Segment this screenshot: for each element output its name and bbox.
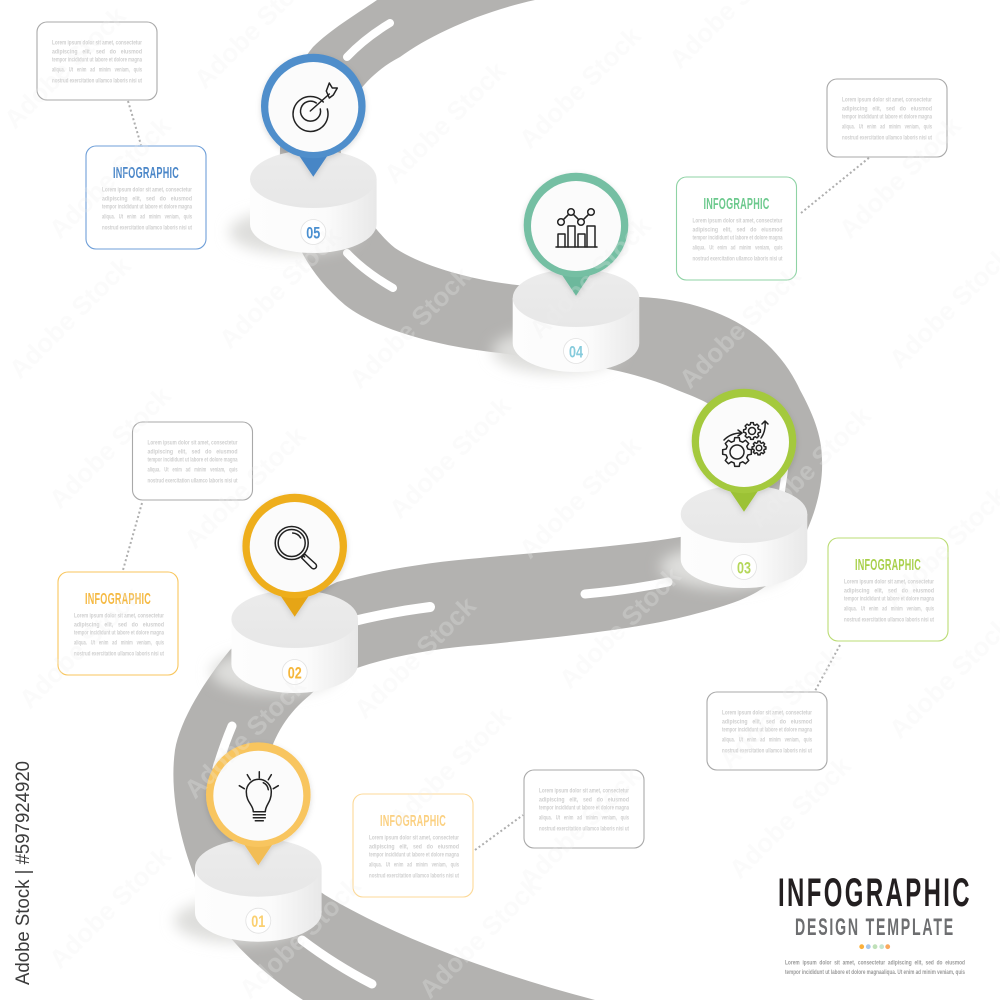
pin xyxy=(261,54,366,177)
number 03: 03 xyxy=(737,558,751,578)
panel: step 3 title card: aliqua. Ut enim ad minim veniam, quis xyxy=(844,605,934,612)
panel: step 3 description: nostrud exercitation ullamco laboris nisi ut xyxy=(722,747,812,754)
panel: step 1 description: nostrud exercitation ullamco laboris nisi ut xyxy=(539,825,629,832)
panel: step 2 title card: nostrud exercitation ullamco laboris nisi ut xyxy=(74,650,164,657)
panel: step 4 description: Lorem ipsum dolor sit amet, consectetur xyxy=(842,96,932,103)
dotted connectors xyxy=(123,101,870,850)
panel: step 1 description xyxy=(524,770,644,848)
watermarks: Adobe Stock xyxy=(713,640,847,774)
panel: step 4 title card: aliqua. Ut enim ad minim veniam, quis xyxy=(692,244,783,251)
number 02: 02 xyxy=(288,664,302,682)
panel: step 1 title card: tempor incididunt ut labore et dolore magna xyxy=(369,851,459,858)
road centre dashes xyxy=(217,23,785,984)
panel: step 4 description xyxy=(827,79,947,157)
footer paragraph xyxy=(785,960,965,976)
panel: step 2 description: tempor incididunt ut labore et dolore magna xyxy=(148,456,238,463)
panel: step 2 description xyxy=(132,422,252,500)
watermarks: Adobe Stock xyxy=(43,110,177,244)
panel: step 5 description: Lorem ipsum dolor sit amet, consectetur xyxy=(52,39,142,46)
panel: step 1 title card: aliqua. Ut enim ad minim veniam, quis xyxy=(369,861,459,868)
icon: magnifying glass xyxy=(275,526,317,569)
panel: step 5 title card: adipiscing elit, sed do eiusmod xyxy=(102,195,192,202)
icon: gears with arrows xyxy=(723,421,768,466)
watermarks: Adobe Stock xyxy=(43,380,177,514)
colour dots xyxy=(859,944,890,949)
watermarks: Adobe Stock xyxy=(513,430,647,564)
panel: step 5 title card: aliqua. Ut enim ad minim veniam, quis xyxy=(102,213,192,220)
panel: step 2 title card: adipiscing elit, sed do eiusmod xyxy=(74,621,164,628)
panel: step 2 description: aliqua. Ut enim ad minim veniam, quis xyxy=(148,466,238,473)
panel: step 5 title card: tempor incididunt ut labore et dolore magna xyxy=(102,203,192,210)
watermarks: Adobe Stock xyxy=(383,390,517,524)
panel: step 3 title card xyxy=(828,538,948,641)
watermarks: Adobe Stock xyxy=(13,580,147,714)
panel: step 4 description: aliqua. Ut enim ad minim veniam, quis xyxy=(842,123,932,130)
panel: step 3 description xyxy=(707,692,827,770)
panel: step 5 title card xyxy=(86,146,206,249)
watermarks: Adobe Stock xyxy=(213,220,347,354)
panel: step 2 title card: aliqua. Ut enim ad minim veniam, quis xyxy=(74,639,164,646)
pin xyxy=(206,742,311,865)
panel: step 4 description: nostrud exercitation ullamco laboris nisi ut xyxy=(842,134,932,141)
panel: step 1 description: aliqua. Ut enim ad minim veniam, quis xyxy=(539,814,629,821)
watermarks: Adobe Stock xyxy=(383,700,517,834)
panel: step 3 title card: INFOGRAPHIC xyxy=(855,557,921,574)
panel: step 2 description: adipiscing elit, sed do eiusmod xyxy=(148,448,238,455)
watermarks: Adobe Stock xyxy=(43,840,177,974)
panel: step 4 title card: adipiscing elit, sed do eiusmod xyxy=(692,226,783,233)
panel: step 4 description: adipiscing elit, sed do eiusmod xyxy=(842,105,932,112)
number 04: 04 xyxy=(569,342,583,362)
panel: step 3 description: Lorem ipsum dolor sit amet, consectetur xyxy=(722,709,812,716)
panel: step 4 title card: INFOGRAPHIC xyxy=(704,196,770,213)
watermarks: Adobe Stock xyxy=(553,560,687,694)
panel: step 4 title card: Lorem ipsum dolor sit amet, consectetur xyxy=(692,217,783,224)
panel: step 3 title card: tempor incididunt ut labore et dolore magna xyxy=(844,595,934,602)
panel: step 5 description: nostrud exercitation ullamco laboris nisi ut xyxy=(52,77,142,84)
watermarks: Adobe Stock xyxy=(178,670,312,804)
station 01: light bulb xyxy=(174,742,322,943)
pin xyxy=(692,389,796,512)
panel: step 3 title card: nostrud exercitation ullamco laboris nisi ut xyxy=(844,616,934,623)
panel: step 1 description: Lorem ipsum dolor sit amet, consectetur xyxy=(539,787,629,794)
panel: step 3 description: tempor incididunt ut labore et dolore magna xyxy=(722,726,812,733)
panel: step 2 title card: Lorem ipsum dolor sit amet, consectetur xyxy=(74,612,164,619)
panel: step 3 description: aliqua. Ut enim ad minim veniam, quis xyxy=(722,736,812,743)
panel: step 5 title card: INFOGRAPHIC xyxy=(113,165,179,182)
icon: target with dart xyxy=(293,83,337,131)
panel: step 3 title card: Lorem ipsum dolor sit amet, consectetur xyxy=(844,578,934,585)
panel: step 1 title card: INFOGRAPHIC xyxy=(380,813,446,830)
panel: step 5 description: aliqua. Ut enim ad minim veniam, quis xyxy=(52,66,142,73)
panel: step 5 title card: nostrud exercitation ullamco laboris nisi ut xyxy=(102,224,192,231)
panel: step 4 description: tempor incididunt ut labore et dolore magna xyxy=(842,113,932,120)
station 03: gears xyxy=(660,389,807,589)
watermarks: Adobe Stock xyxy=(523,210,657,344)
station 02: magnifier xyxy=(211,494,358,694)
watermarks: Adobe Stock xyxy=(743,400,877,534)
watermarks: Adobe Stock xyxy=(833,110,967,244)
panel: step 1 title card: Lorem ipsum dolor sit amet, consectetur xyxy=(369,834,459,841)
icon: bar and line chart xyxy=(556,209,597,247)
watermarks: Adobe Stock xyxy=(378,55,512,189)
pin xyxy=(524,173,628,296)
panel: step 5 description xyxy=(37,22,157,100)
panel: step 5 title card: Lorem ipsum dolor sit amet, consectetur xyxy=(102,186,192,193)
panel: step 4 title card: nostrud exercitation ullamco laboris nisi ut xyxy=(692,255,782,262)
panel: step 4 title card: tempor incididunt ut labore et dolore magna xyxy=(692,234,783,241)
title xyxy=(778,871,972,941)
panel: step 4 title card xyxy=(676,177,796,280)
panel: step 2 description: Lorem ipsum dolor sit amet, consectetur xyxy=(148,439,238,446)
panel: step 5 description: adipiscing elit, sed do eiusmod xyxy=(52,48,142,55)
panel: step 2 title card xyxy=(58,572,178,675)
panel: step 3 description: adipiscing elit, sed do eiusmod xyxy=(722,718,812,725)
panel: step 2 title card: INFOGRAPHIC xyxy=(85,591,151,608)
watermarks: Adobe Stock xyxy=(3,250,137,384)
station 04: chart xyxy=(492,173,639,373)
panel: step 1 title card: nostrud exercitation ullamco laboris nisi ut xyxy=(369,872,459,879)
panel: step 1 description: tempor incididunt ut labore et dolore magna xyxy=(539,804,629,811)
number 05: 05 xyxy=(306,224,320,242)
panel: step 2 description: nostrud exercitation ullamco laboris nisi ut xyxy=(148,477,238,484)
panel: step 5 description: tempor incididunt ut labore et dolore magna xyxy=(52,56,142,63)
panel: step 3 title card: adipiscing elit, sed do eiusmod xyxy=(844,587,934,594)
panel: step 1 description: adipiscing elit, sed do eiusmod xyxy=(539,796,629,803)
watermarks: Adobe Stock xyxy=(178,420,312,554)
pin xyxy=(242,494,347,617)
watermarks: Adobe Stock xyxy=(673,260,807,394)
number 01: 01 xyxy=(251,912,265,931)
watermarks: Adobe Stock xyxy=(513,760,647,894)
panel: step 1 title card: adipiscing elit, sed do eiusmod xyxy=(369,843,459,850)
watermarks: Adobe Stock xyxy=(723,750,857,884)
panel: step 2 title card: tempor incididunt ut labore et dolore magna xyxy=(74,629,164,636)
watermarks: Adobe Stock xyxy=(348,590,482,724)
stock id label: Adobe Stock | #597924920 xyxy=(13,761,34,985)
watermarks: Adobe Stock xyxy=(343,260,477,394)
watermarks: Adobe Stock xyxy=(513,20,647,154)
watermarks: Adobe Stock xyxy=(0,0,132,134)
icon: light bulb xyxy=(239,772,278,821)
winding road xyxy=(173,0,822,1000)
station 05: target xyxy=(229,54,377,254)
panel: step 1 title card xyxy=(353,794,473,897)
